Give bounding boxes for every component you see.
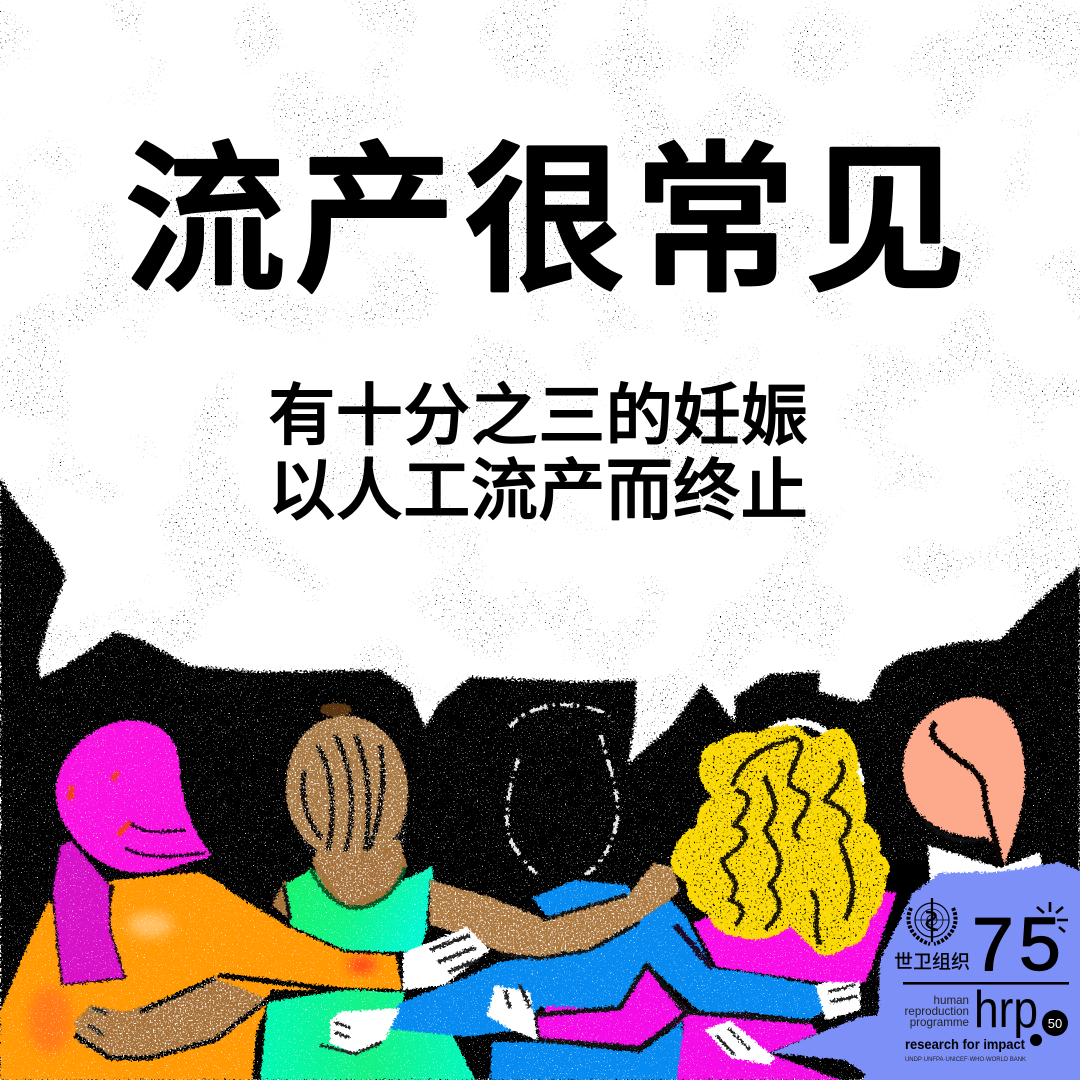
HRP logo: 50 <box>1048 1016 1062 1031</box>
subtitle: 有十分之三的妊娠 <box>268 379 808 454</box>
panel: periwinkle sweater <box>770 862 1080 1080</box>
person: curly yellow hair over magenta top <box>671 722 897 982</box>
subtitle: 以人工流产而终止 <box>268 454 808 529</box>
75th anniversary mark: 7 <box>972 902 1014 986</box>
HRP programme name <box>905 994 969 1029</box>
person: black hair and blue top <box>377 705 840 1080</box>
black crayon background mass <box>0 478 1080 1080</box>
person: orange top and magenta headscarf <box>0 720 405 1080</box>
brown arm wrapped around the orange top <box>75 978 270 1060</box>
title: 流产很常见 <box>124 131 974 312</box>
illustration: five women embracing, seen from behind <box>0 470 1080 1080</box>
75th anniversary mark <box>972 902 1068 986</box>
brown arm reaching across the blue top <box>430 863 680 958</box>
partner organisations: UNDP·UNFPA·UNICEF·WHO·WORLD BANK <box>905 1057 1026 1063</box>
WHO wordmark: 世卫组织 <box>894 951 970 973</box>
person: peach hair and white collar <box>903 697 1045 880</box>
white hands <box>320 927 860 1065</box>
white grain over black mass and figures <box>0 470 1080 1080</box>
dense chalk grain on brown skin and hair <box>75 716 680 1060</box>
HRP programme name: reproduction <box>905 1005 969 1018</box>
icon: WHO emblem <box>908 898 956 944</box>
tagline: research for impact <box>905 1037 1026 1052</box>
HRP logo: hrp <box>974 981 1038 1039</box>
HRP programme name: programme <box>910 1016 969 1029</box>
HRP programme name: human <box>934 994 969 1007</box>
black speckle texture on the white area <box>0 0 1080 760</box>
subtitle <box>268 379 808 529</box>
75th anniversary mark: 5 <box>1019 902 1061 986</box>
blue panel with logos <box>770 862 1080 1080</box>
person: green tank top and braided hair <box>260 703 475 1080</box>
divider <box>903 982 1069 985</box>
dark grain over the curly hair <box>670 725 890 955</box>
